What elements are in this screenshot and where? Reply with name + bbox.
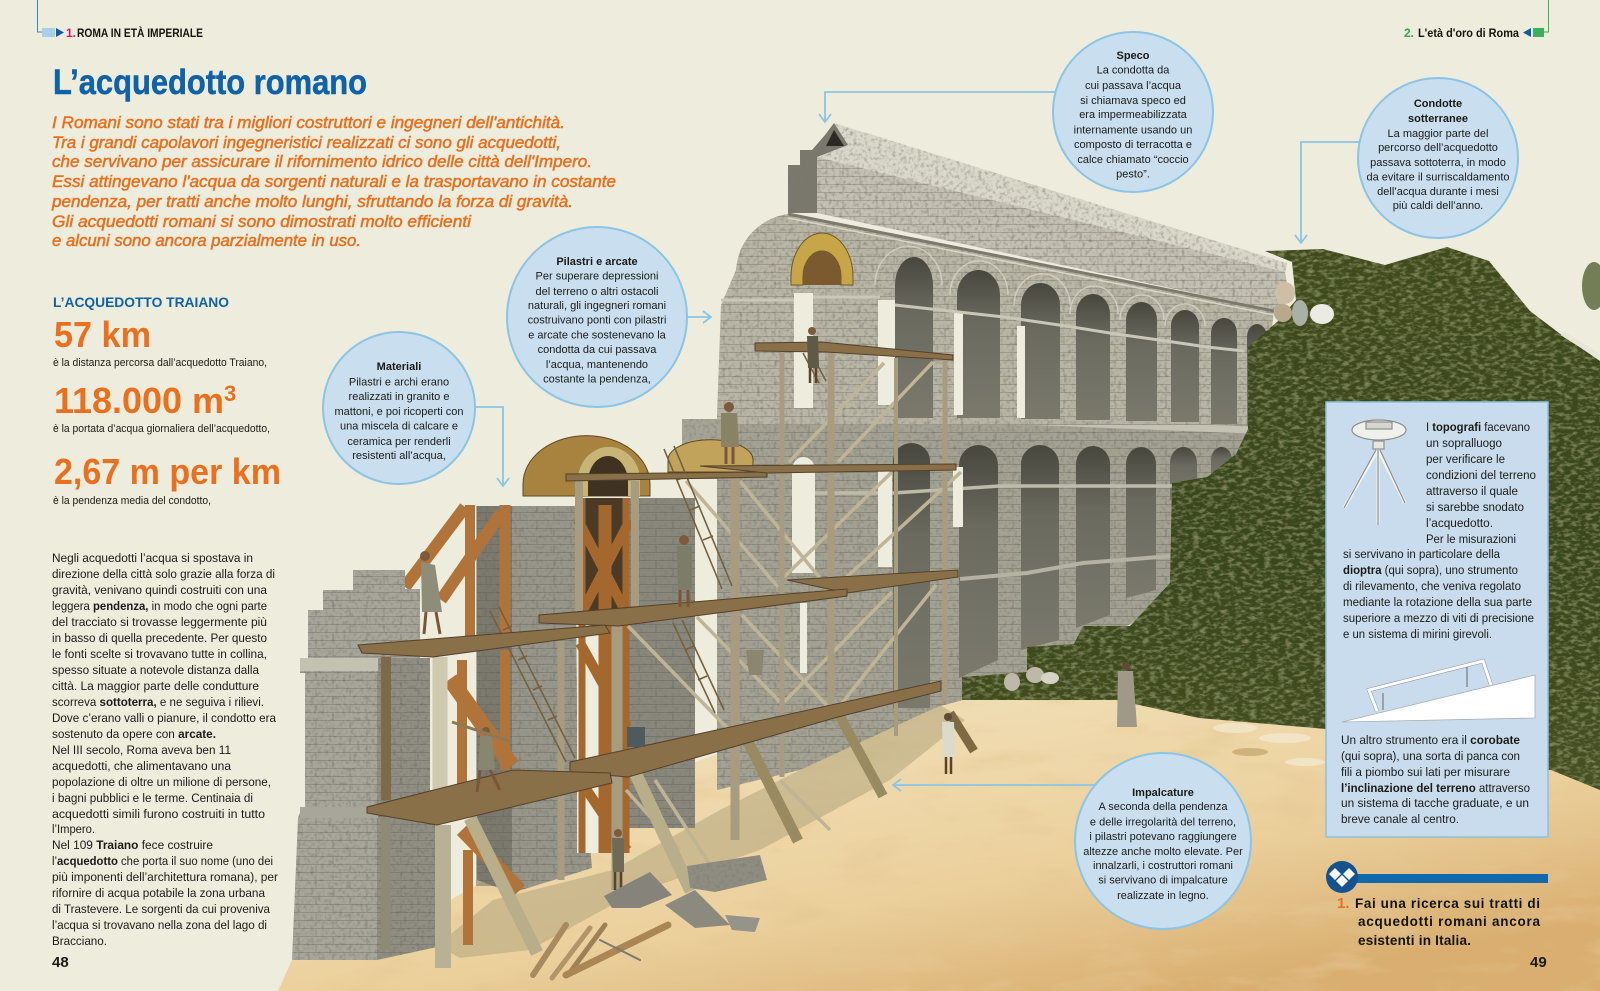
callout: Impalcature: altezze anche molto elevate. Per — [1083, 846, 1243, 858]
panel: topografi instruments: Per le misurazioni — [1426, 532, 1516, 546]
activity bar with icon — [1326, 861, 1548, 893]
intro text: e alcuni sono ancora parzialmente in uso. — [52, 231, 361, 250]
body text left column: Negli acquedotti l’acqua si spostava in — [52, 551, 253, 565]
figure in tunic — [942, 713, 955, 774]
stats: acquedotto Traiano: è la portata d’acqua giornaliera dell’acquedotto, — [53, 423, 270, 435]
callout: Speco: calce chiamato “coccio — [1077, 154, 1189, 166]
panel: topografi instruments: Un altro strumento era il corobate — [1341, 733, 1520, 747]
diagonal braces — [626, 362, 961, 880]
callout: Speco: La condotta da — [1097, 64, 1170, 76]
callout: Speco: cui passava l’acqua — [1085, 80, 1182, 92]
callout: Pilastri e arcate: condotta da cui passava — [538, 344, 657, 356]
body text left column: scorreva sottoterra, e ne seguiva i rilievi. — [52, 695, 264, 709]
body text left column: le fonti scelte si trovavano tutte in collina, — [52, 647, 267, 661]
callout: Pilastri e arcate: e arcate che sostenevano la — [528, 330, 667, 342]
callout: Speco: composto di terracotta e — [1074, 139, 1192, 151]
header right: section tab: 2. — [1404, 26, 1414, 40]
arrow: speco — [819, 92, 1056, 122]
header left: chapter tab: ROMA IN ETÀ IMPERIALE — [77, 25, 203, 40]
upper pier imposts — [895, 305, 1244, 351]
body text left column: acquedotti, che alimentavano una — [52, 759, 231, 773]
activity text: Fai una ricerca sui tratti di — [1355, 896, 1540, 911]
body text left column: di Trastevere. Le sorgenti da cui proveniva — [52, 902, 270, 916]
callout: Impalcature: realizzate in legno. — [1117, 890, 1209, 902]
worker at top arch — [721, 402, 739, 464]
header right: section tab — [1404, 0, 1548, 40]
body text left column: leggera pendenza, in modo che ogni parte — [52, 599, 267, 613]
barrel on platform — [627, 727, 645, 747]
scaffolding poles and braces — [386, 350, 974, 968]
body text left column: Bracciano. — [52, 934, 107, 948]
felled logs pile — [533, 925, 668, 978]
panel: topografi instruments: superiore a mezzo di viti di precisione — [1343, 611, 1534, 625]
stats: acquedotto Traiano: è la pendenza media del condotto, — [53, 495, 211, 507]
callout: Speco: Speco — [1116, 50, 1150, 62]
page number 49: 49 — [1530, 954, 1547, 971]
body text left column: i bagni pubblici e le terme. Centinaia di — [52, 791, 253, 805]
callout: Materiali: mattoni, e poi ricoperti con — [334, 406, 464, 418]
panel: topografi instruments: un sopralluogo — [1426, 436, 1502, 450]
callout: Speco: pesto”. — [1116, 168, 1150, 180]
callout: Impalcature: si servivano di impalcature — [1098, 874, 1228, 886]
header left: chapter tab: 1. — [66, 26, 76, 40]
worker with hammer — [420, 551, 442, 634]
body text left column: Nel III secolo, Roma aveva ben 11 — [52, 743, 231, 757]
sand ground — [278, 660, 1600, 991]
worker on ladder — [677, 535, 692, 607]
figure in toga — [1117, 662, 1137, 727]
body text left column: Nel 109 Traiano fece costruire — [52, 838, 213, 852]
callout: Pilastri e arcate: Pilastri e arcate — [556, 256, 638, 268]
panel: topografi instruments: I topografi facevano — [1426, 420, 1530, 434]
panel: topografi instruments: un sistema di tacche graduate, e un — [1341, 796, 1529, 810]
icon: corobate — [1342, 661, 1535, 722]
icon: dioptra — [1344, 420, 1406, 525]
stone pile — [604, 855, 767, 932]
intro text: Gli acquedotti romani si sono dimostrati molto efficienti — [52, 212, 472, 231]
callout: Materiali: resistenti all’acqua, — [352, 450, 446, 462]
callout: Impalcature — [1075, 753, 1251, 929]
body text left column: l’acquedotto che porta il suo nome (uno dei — [52, 854, 273, 868]
aqueduct upper tier with arches — [717, 214, 1274, 673]
front stone tower — [292, 570, 437, 960]
activity text — [1337, 895, 1540, 948]
vertical poles — [386, 350, 945, 968]
title: L’acquedotto romano — [53, 63, 367, 102]
callout: Impalcature: Impalcature — [1132, 787, 1194, 799]
intro text: Tra i grandi capolavori ingegneristici realizzati ci sono gli acquedotti, — [52, 133, 561, 152]
timber formwork — [577, 498, 623, 853]
arrow: materiali — [474, 407, 509, 486]
callout: Condotte sotterranee: più caldi dell’anno. — [1393, 200, 1483, 212]
workers — [420, 327, 1137, 890]
specus channel wall and roof — [788, 123, 1290, 315]
shadow at aqueduct base — [437, 705, 965, 958]
bucket hanging from scaffold — [746, 650, 764, 675]
body text left column: in basso di quella precedente. Per questo — [52, 631, 267, 645]
callout: Speco: era impermeabilizzata — [1079, 109, 1188, 121]
panel: topografi instruments: si sarebbe snodato — [1426, 500, 1524, 514]
callout: Speco: internamente usando un — [1074, 124, 1192, 136]
stats: acquedotto Traiano: 2,67 m per km — [54, 451, 281, 492]
callout: Condotte sotterranee: percorso dell’acquedotto — [1378, 142, 1498, 154]
body text left column: rifornire di acqua potabile la zona urbana — [52, 886, 265, 900]
arrow: impalcature — [893, 779, 1097, 791]
body text left column: spesso situate a notevole distanza dalla — [52, 663, 259, 677]
body text left column: più imponenti dell’architettura romana), per — [52, 870, 278, 884]
body text left column: l’acqua si trovavano nella zona del lago di — [52, 918, 267, 932]
ground struts — [470, 713, 974, 953]
activity text: 1. — [1337, 895, 1350, 912]
golden centering arch at the top — [791, 233, 853, 285]
intro text: I Romani sono stati tra i migliori costruttori e ingegneri dell'antichità. — [52, 113, 565, 132]
callout: Materiali — [323, 332, 475, 484]
panel: topografi instruments: mediante la rotazione della sua parte — [1343, 595, 1532, 609]
body text left column: l’Impero. — [52, 822, 95, 836]
callout: Materiali: Pilastri e archi erano — [349, 376, 449, 388]
header left: chapter tab — [38, 0, 203, 40]
callout: Materiali: Materiali — [377, 361, 421, 373]
ladders — [490, 351, 826, 762]
activity text: esistenti in Italia. — [1358, 933, 1471, 948]
panel: topografi instruments: di rilevamento, che veniva regolato — [1343, 579, 1521, 593]
rocky tufts at the edge of the grass — [1213, 723, 1325, 766]
intro text: Essi attingevano l'acqua da sorgenti naturali e la trasportavano in costante — [52, 172, 616, 191]
stats: acquedotto Traiano: 57 km — [54, 314, 151, 355]
stats: acquedotto Traiano: 3 — [224, 381, 236, 406]
stones in the grass — [1004, 667, 1059, 691]
callout: Materiali: ceramica per renderli — [347, 436, 451, 448]
callout: Pilastri e arcate: costruivano ponti con pilastri — [528, 314, 666, 326]
scaffolding wooden platforms — [358, 342, 958, 825]
body text left column — [52, 551, 278, 948]
rocks at aqueduct end — [1274, 282, 1334, 326]
body text left column: città. La maggior parte delle condutture — [52, 679, 259, 693]
illustration: Roman aqueduct under construction — [278, 123, 1600, 991]
callout: Condotte sotterranee: da evitare il surriscaldamento — [1366, 172, 1510, 184]
intro text: pendenza, per tratti anche molto lunghi, sfruttando la forza di gravità. — [51, 192, 573, 211]
panel: topografi instruments: per verificare le — [1426, 452, 1505, 466]
arrow: pilastri e arcate — [686, 311, 711, 323]
intro text: che servivano per assicurare il rifornimento idrico delle città dell'Impero. — [52, 152, 592, 171]
worker on ground — [612, 829, 624, 890]
callout: Impalcature: A seconda della pendenza — [1098, 801, 1228, 813]
callout: Condotte sotterranee: sotterranee — [1408, 113, 1468, 125]
panel: topografi instruments: attraverso il quale — [1426, 484, 1518, 498]
pier 2 and wood arch centering — [405, 419, 753, 945]
body text left column: Dove c’erano valli o pianure, il condotto era — [52, 711, 276, 725]
panel: topografi instruments: e un sistema di mirini girevoli. — [1343, 627, 1492, 641]
worker carrying beam — [452, 722, 512, 792]
stats: acquedotto Traiano: è la distanza percorsa dall’acquedotto Traiano, — [53, 357, 267, 369]
callout: Pilastri e arcate: Per superare depressioni — [536, 270, 658, 282]
body text left column: popolazione di oltre un milione di persone, — [52, 775, 271, 789]
callout: Materiali: realizzati in granito e — [349, 391, 449, 403]
callout: Impalcature: i pilastri potevano raggiungere — [1089, 831, 1237, 843]
worker on upper scaffold — [807, 327, 819, 383]
stats: acquedotto Traiano — [53, 294, 281, 507]
aqueduct lower tier — [717, 415, 1250, 790]
panel: topografi instruments: dioptra (qui sopra), uno strumento — [1343, 563, 1518, 577]
panel: topografi instruments: fili a piombo sui lati per misurare — [1341, 765, 1510, 779]
callout arrows — [474, 92, 1362, 791]
tree and white stones at right edge — [1562, 262, 1600, 357]
callout: Speco: si chiamava speco ed — [1080, 95, 1186, 107]
arch rings — [875, 246, 1205, 326]
panel: topografi instruments: breve canale al centro. — [1341, 812, 1459, 826]
panel: topografi instruments — [1326, 402, 1548, 837]
callout: Impalcature: innalzarli, i costruttori romani — [1093, 860, 1233, 872]
grass hill — [962, 247, 1600, 790]
callout: Pilastri e arcate: del terreno o altri ostacoli — [536, 286, 658, 298]
panel: topografi instruments: l’inclinazione del terreno attraverso — [1341, 781, 1530, 795]
header right: section tab: L'età d'oro di Roma — [1418, 26, 1519, 40]
callout: Condotte sotterranee: La maggior parte del — [1388, 128, 1488, 140]
stats: acquedotto Traiano: L’ACQUEDOTTO TRAIANO — [53, 294, 229, 310]
body text left column: acquedotti simili furono costruiti in tutto — [52, 807, 265, 821]
page number 48: 48 — [52, 954, 69, 971]
lower tier band — [717, 418, 1250, 430]
see-through slits between piers — [792, 293, 1025, 673]
callout: Materiali: una miscela di calcare e — [340, 420, 458, 432]
callout: Condotte sotterranee — [1358, 78, 1518, 238]
intro text — [51, 113, 616, 250]
callout: Pilastri e arcate: l’acqua, mantenendo — [546, 359, 648, 371]
panel: topografi instruments: si servivano in particolare della — [1343, 547, 1500, 561]
body text left column: direzione della città solo grazie alla forza di — [52, 567, 275, 581]
callout: Pilastri e arcate: naturali, gli ingegneri romani — [528, 300, 666, 312]
activity text: acquedotti romani ancora — [1358, 914, 1540, 929]
body text left column: sostenuto da opere con arcate. — [52, 727, 216, 741]
callout: Pilastri e arcate: costante la pendenza, — [543, 374, 651, 386]
arrow: condotte sotterranee — [1295, 142, 1362, 243]
callout: Condotte sotterranee: Condotte — [1414, 98, 1462, 110]
callout: Pilastri e arcate — [507, 227, 687, 407]
panel: topografi instruments: l’acquedotto. — [1426, 516, 1493, 530]
callout: Speco — [1053, 32, 1213, 192]
body text left column: del tracciato si trovasse leggermente più — [52, 615, 267, 629]
panel: topografi instruments: (qui sopra), una sorta di panca con — [1341, 749, 1520, 763]
stats: acquedotto Traiano: 118.000 m — [54, 380, 224, 421]
body text left column: gravità, venivano quindi costruiti con una — [52, 583, 267, 597]
callout: Impalcature: e delle irregolarità del terreno, — [1090, 816, 1236, 828]
panel: topografi instruments: condizioni del terreno — [1426, 468, 1536, 482]
callout: Condotte sotterranee: passava sottoterra, in modo — [1370, 157, 1506, 169]
callout: Condotte sotterranee: dell’acqua durante i mesi — [1377, 186, 1499, 198]
